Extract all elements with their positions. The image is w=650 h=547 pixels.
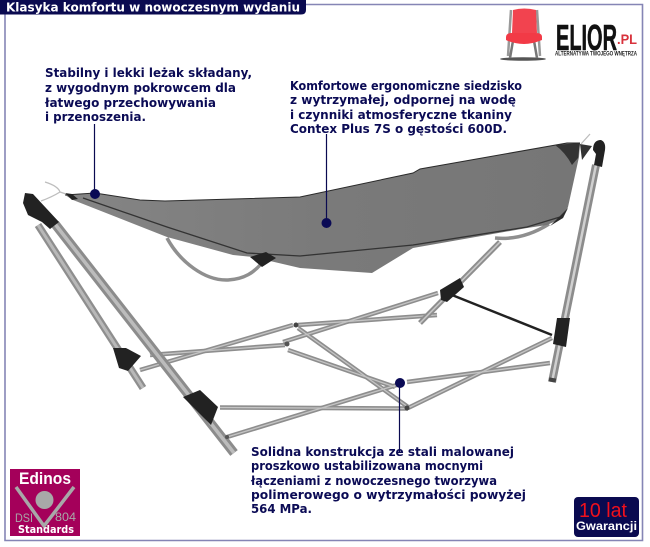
right pole xyxy=(552,165,596,382)
text block: frame: proszkowo ustabilizowana mocnymi xyxy=(251,459,483,473)
under-seat tubes xyxy=(167,224,549,280)
small joints xyxy=(404,406,410,410)
icon: red chair xyxy=(500,8,546,61)
badge: Edinos standards xyxy=(10,469,80,536)
badge: 10 years warranty: Gwarancji xyxy=(576,519,637,533)
black strap xyxy=(452,295,552,335)
title bar: Klasyka komfortu w nowoczesnym wydaniu xyxy=(6,0,300,14)
base bar highlights xyxy=(140,293,552,437)
badge: Edinos standards: Edinos xyxy=(19,469,71,488)
fabric corners xyxy=(250,252,276,267)
badge: 10 years warranty: 10 lat xyxy=(579,500,627,522)
badge: Edinos standards: Standards xyxy=(18,523,74,536)
left poles xyxy=(38,225,143,388)
callout marker: folding lounger xyxy=(90,124,100,199)
text block: lounger: Stabilny i lekki leżak składany, xyxy=(45,66,252,80)
badge: Edinos standards: DSI xyxy=(15,511,33,525)
text block: frame: polimerowego o wytrzymałości powyżej xyxy=(251,488,526,502)
text block: frame: łączeniami z nowoczesnego tworzywa xyxy=(250,474,497,488)
lower left brackets xyxy=(113,348,141,371)
text block: frame: 564 MPa. xyxy=(251,502,312,516)
base bars xyxy=(140,293,552,437)
joints and brackets xyxy=(23,140,605,439)
hammock frame xyxy=(38,165,596,453)
text block: frame xyxy=(250,445,526,516)
mid pole bracket xyxy=(440,278,464,302)
text block: seat: i czynniki atmosferyczne tkaniny xyxy=(290,108,512,122)
text block: lounger: łatwego przechowywania xyxy=(44,96,216,110)
hammock fabric seat xyxy=(65,143,580,273)
text block: seat: Contex Plus 7S o gęstości 600D. xyxy=(290,122,507,136)
badge: 10 years warranty xyxy=(574,497,639,537)
callout marker: seat fabric xyxy=(322,134,332,228)
callout marker: steel frame xyxy=(395,378,405,452)
hook cords xyxy=(41,134,590,201)
right pole bracket xyxy=(553,318,570,347)
text block: lounger xyxy=(44,66,252,124)
middle right pole xyxy=(420,242,500,323)
text block: lounger: z wygodnym pokrowcem dla xyxy=(45,81,236,95)
badge: Edinos standards: 804 xyxy=(55,510,76,524)
right head xyxy=(593,140,605,167)
text block: seat: z wytrzymałej, odpornej na wodę xyxy=(290,93,516,107)
logo: Elior.pl: .PL xyxy=(617,31,637,47)
text block: frame: Solidna konstrukcja ze stali malowanej xyxy=(251,445,514,459)
logo: Elior.pl xyxy=(500,8,637,61)
left top head xyxy=(23,193,59,229)
text block: seat: Komfortowe ergonomiczne siedzisko xyxy=(290,79,522,93)
text block: seat xyxy=(290,79,522,136)
icon: V with circle xyxy=(16,487,74,526)
text block: lounger: i przenoszenia. xyxy=(45,110,146,124)
